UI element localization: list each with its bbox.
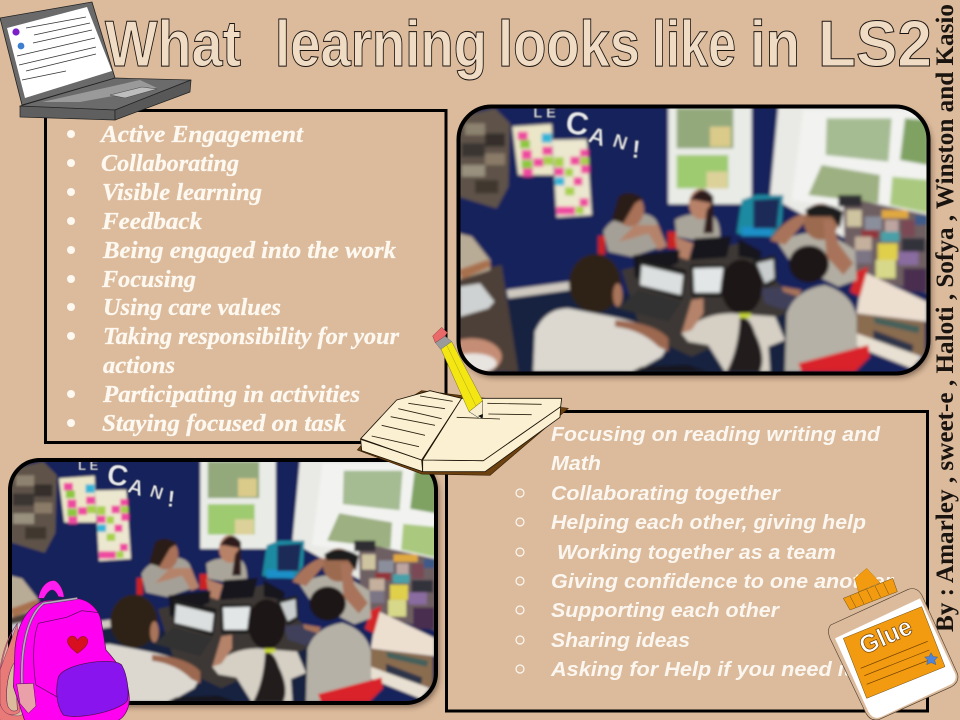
text: behaviours bullet list: actions	[103, 353, 175, 379]
text: teamwork bullet list: Collaborating together	[551, 482, 781, 505]
icon: laptop	[0, 2, 191, 120]
text: teamwork bullet list: Asking for Help if you need it	[550, 658, 852, 681]
text: teamwork bullet list	[516, 423, 894, 681]
text: teamwork bullet list: Giving confidence to one another	[551, 570, 894, 593]
text: behaviours bullet list: Focusing	[101, 267, 196, 293]
text: behaviours bullet list	[67, 122, 400, 437]
text: behaviours bullet list: Using care values	[103, 295, 281, 321]
text: behaviours bullet list: Staying focused on task	[102, 411, 346, 437]
text: behaviours bullet list: Participating in activities	[102, 382, 360, 408]
title: LS2	[818, 7, 932, 80]
vertical credits: By : Amarley , sweet-e , Haloti , Sofya , Winston and Kasio	[932, 4, 959, 632]
panel: teamwork list	[446, 412, 928, 711]
title: in	[750, 7, 800, 80]
text: behaviours bullet list: Being engaged into the work	[102, 238, 396, 264]
text: teamwork bullet list: Focusing on reading writing and	[551, 423, 880, 446]
text: behaviours bullet list: Active Engagement	[99, 122, 304, 148]
title: looks	[498, 7, 640, 80]
text: behaviours bullet list: Visible learning	[102, 180, 262, 206]
text: teamwork bullet list: Working together as a team	[557, 541, 836, 564]
text: teamwork bullet list: Math	[551, 452, 601, 475]
title	[105, 7, 932, 80]
text: behaviours bullet list: Taking responsibility for your	[103, 324, 400, 350]
title: like	[652, 7, 736, 80]
title: learning	[275, 7, 487, 80]
text: behaviours bullet list: Feedback	[101, 209, 202, 235]
icon: notebook with pencil	[357, 327, 568, 475]
panel: learning behaviours list	[46, 110, 446, 442]
icon: glue bottle: Glue	[855, 613, 917, 660]
photo: classroom group, bottom left	[0, 454, 442, 709]
text: teamwork bullet list: Supporting each other	[551, 599, 780, 622]
icon: glue bottle	[828, 568, 958, 720]
photo: classroom group, top right	[442, 100, 935, 380]
text: teamwork bullet list: Helping each other, giving help	[551, 511, 866, 534]
text: teamwork bullet list: Sharing ideas	[551, 629, 690, 652]
text: behaviours bullet list: Collaborating	[101, 151, 239, 177]
icon: pink backpack	[0, 581, 129, 720]
title: What	[105, 7, 241, 80]
